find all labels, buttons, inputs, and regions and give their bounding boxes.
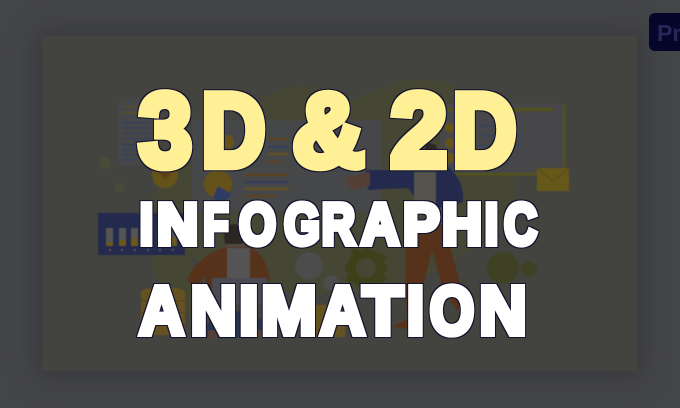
small circles left: [99, 157, 124, 192]
document left: [119, 100, 155, 165]
olive background blob: [150, 79, 516, 338]
icon: envelope: [537, 168, 569, 191]
person standing: [343, 142, 463, 329]
heading: ANIMATION: A: [320, 273, 365, 349]
heading: ANIMATION: I: [239, 273, 259, 349]
person seated: [187, 224, 270, 338]
heading: 3D & 2D: D: [202, 73, 265, 189]
heading: 3D & 2D: &: [292, 73, 364, 189]
panel shadow: [36, 32, 643, 377]
right board: [440, 104, 566, 176]
heading: 3D & 2D: 3: [139, 73, 192, 189]
heading: INFOGRAPHIC: I: [485, 192, 498, 257]
badge: Premiere Pro: [649, 13, 680, 51]
coins right: [305, 305, 345, 337]
heading: INFOGRAPHIC: C: [504, 192, 537, 257]
heading: 3D & 2D: 2: [391, 73, 447, 189]
heading: ANIMATION: M: [261, 273, 317, 349]
pie chart: [204, 135, 234, 204]
heading: INFOGRAPHIC: A: [361, 192, 399, 257]
coins left: [141, 288, 185, 335]
icon: gear: [345, 247, 387, 289]
lighter floor swoosh: [190, 215, 515, 338]
heading: INFOGRAPHIC: H: [442, 192, 482, 257]
heading: ANIMATION: I: [407, 273, 424, 349]
heading: ANIMATION: O: [430, 273, 474, 349]
heading: INFOGRAPHIC: G: [284, 192, 320, 257]
heading: INFOGRAPHIC: R: [322, 192, 355, 257]
dashboard board centre: [192, 120, 382, 212]
heading: INFOGRAPHIC: O: [239, 192, 276, 257]
heading: ANIMATION: N: [479, 273, 527, 349]
heading: INFOGRAPHIC: I: [140, 192, 153, 257]
target icon: [152, 162, 178, 188]
heading: 3D & 2D: D: [453, 73, 516, 189]
heading: INFOGRAPHIC: P: [403, 192, 439, 257]
heading: INFOGRAPHIC: F: [203, 192, 228, 257]
illustration panel: [42, 36, 637, 371]
heading: ANIMATION: A: [139, 273, 184, 349]
heading: INFOGRAPHIC: N: [157, 192, 198, 257]
decorative circles: [295, 252, 537, 291]
bar chart card: [98, 213, 185, 255]
heading: ANIMATION: N: [191, 273, 236, 349]
panel dimming layer: [42, 36, 637, 371]
heading: ANIMATION: T: [363, 273, 403, 349]
